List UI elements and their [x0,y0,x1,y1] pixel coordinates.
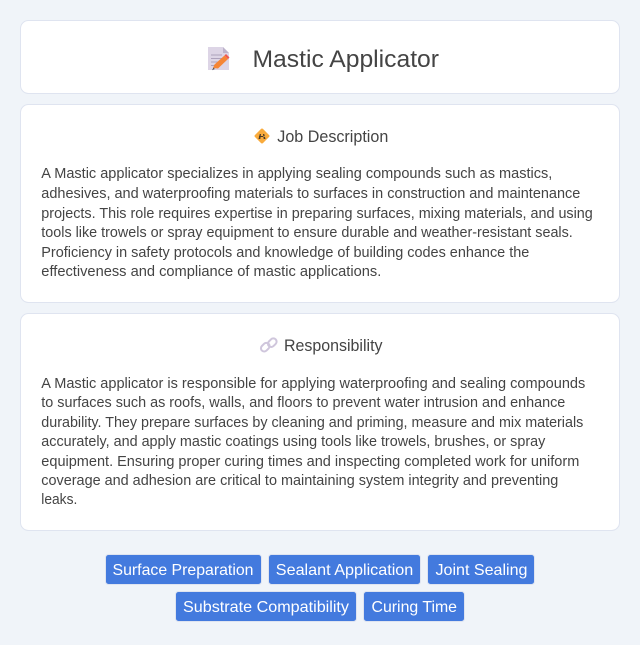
panel: responsibility [20,314,620,530]
heading: responsibility: Responsibility [284,337,383,355]
text block: job description: tools like trowels or spray equipment to ensure durable and weather-resistant seals. [41,225,573,241]
tag: substrate compatibility: Substrate Compatibility [183,599,349,616]
text block: responsibility: to surfaces such as roofs, walls, and floors to prevent water intrusion and enhance [41,395,565,411]
text block: job description: projects. This role requires expertise in preparing surfaces, mixing materials, and using [41,206,593,222]
text block: job description: effectiveness and compliance of mastic applications. [41,264,381,280]
heading: job description: Job Description [277,128,388,146]
text block: job description: Proficiency in safety protocols and knowledge of building codes enhance the [41,245,529,261]
icon: chain link [260,337,278,353]
tag: substrate compatibility [176,592,356,622]
text block: responsibility: A Mastic applicator is responsible for applying waterproofing and sealing compounds [41,376,585,392]
text block: responsibility [41,376,585,508]
text block: responsibility: coverage and adhesion are critical to maintaining system integrity and preventing [41,473,558,489]
icon: construction sign [254,128,270,144]
text block: job description [41,166,593,280]
tag: joint sealing: Joint Sealing [436,562,528,579]
panel: title card [20,20,620,94]
skill tags [106,554,534,622]
tag: joint sealing [428,554,534,584]
tag: curing time [364,592,464,622]
panel: job description [20,104,620,302]
tag: curing time: Curing Time [372,599,457,616]
text block: responsibility: durability. They prepare surfaces by cleaning and priming, measure and mix materials [41,415,583,431]
text block: job description: adhesives, and waterproofing materials to surfaces in construction and maintenance [41,186,580,202]
text block: responsibility: equipment. Ensuring proper curing times and inspecting completed work for uniform [41,454,579,470]
title: Mastic Applicator [252,46,439,73]
tag: surface preparation [106,554,262,584]
tag: sealant application [268,554,420,584]
text block: responsibility: leaks. [41,492,77,508]
text block: job description: A Mastic applicator specializes in applying sealing compounds such as mastics, [41,166,552,182]
tag: surface preparation: Surface Preparation [112,562,254,579]
icon: memo with pencil [208,47,230,70]
text block: responsibility: accurately, and apply mastic coatings using tools like trowels, brushes, or spray [41,434,546,450]
tag: sealant application: Sealant Application [276,562,413,579]
